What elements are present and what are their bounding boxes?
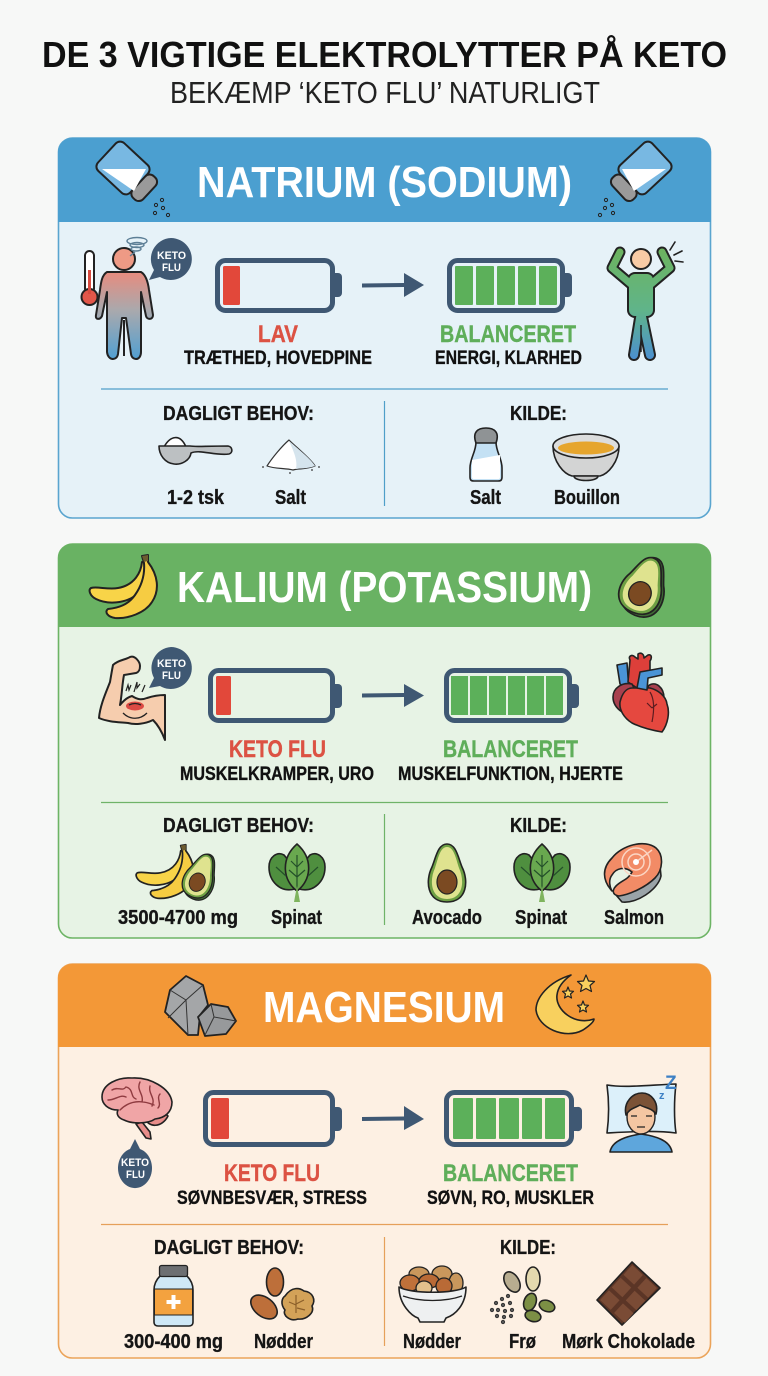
section: daily need: DAGLIGT BEHOV: — [163, 815, 314, 837]
status: balanced — [435, 321, 582, 369]
divider — [101, 1224, 668, 1346]
heading: kalium: KALIUM (POTASSIUM) — [177, 563, 592, 612]
section: source: KILDE: — [510, 815, 567, 837]
icon: heart — [613, 653, 668, 732]
icon: energetic person — [612, 242, 683, 355]
icon: banana and avocado — [136, 845, 224, 904]
header: kalium — [58, 544, 711, 627]
speech bubble: keto flu: FLU — [162, 262, 181, 274]
speech bubble: keto flu — [149, 238, 192, 280]
icon: supplement bottle — [154, 1266, 193, 1326]
icon: spinach — [514, 844, 570, 902]
header: magnesium — [58, 964, 711, 1047]
icon: brain — [102, 1078, 172, 1139]
arrow — [362, 1106, 424, 1130]
icon: banana — [90, 555, 157, 618]
battery: low — [210, 670, 342, 720]
icon: bowl of nuts — [399, 1266, 466, 1322]
status: balanced: BALANCERET — [440, 321, 576, 348]
panel: natrium — [58, 138, 711, 518]
section: daily need: 300-400 mg — [124, 1331, 223, 1353]
status: balanced: MUSKELFUNKTION, HJERTE — [398, 764, 623, 785]
status: balanced: ENERGI, KLARHED — [435, 348, 582, 369]
section: source: KILDE: — [500, 1237, 556, 1259]
icon: seeds — [490, 1267, 556, 1324]
status: balanced: BALANCERET — [443, 736, 578, 763]
icon: salmon — [604, 844, 662, 902]
speech bubble: keto flu — [118, 1139, 152, 1188]
section: source — [399, 1237, 695, 1353]
title: DE 3 VIGTIGE ELEKTROLYTTER PÅ KETO — [42, 34, 727, 75]
divider — [101, 389, 668, 506]
speech bubble: keto flu: FLU — [162, 670, 181, 682]
status: keto flu: SØVNBESVÆR, STRESS — [177, 1188, 367, 1209]
section: daily need: 3500-4700 mg — [118, 907, 238, 929]
status: balanced: BALANCERET — [443, 1160, 578, 1187]
status: low: TRÆTHED, HOVEDPINE — [184, 348, 372, 369]
section: daily need: DAGLIGT BEHOV: — [154, 1237, 304, 1259]
status: keto flu: KETO FLU — [224, 1160, 320, 1187]
battery: balanced — [446, 670, 579, 720]
status: keto flu — [180, 736, 374, 785]
heading: magnesium: MAGNESIUM — [263, 983, 505, 1032]
section: daily need: DAGLIGT BEHOV: — [163, 403, 314, 425]
section: source: KILDE: — [510, 403, 567, 425]
section: source: Frø — [509, 1331, 537, 1353]
icon: sore muscle — [99, 657, 165, 740]
section: daily need: Nødder — [254, 1331, 313, 1353]
status: keto flu: KETO FLU — [229, 736, 326, 763]
section: daily need — [118, 815, 325, 929]
section: daily need: Spinat — [271, 907, 322, 929]
subtitle: BEKÆMP ‘KETO FLU’ NATURLIGT — [170, 75, 600, 110]
icon: spinach — [269, 844, 325, 902]
status: keto flu: MUSKELKRAMPER, URO — [180, 764, 374, 785]
icon: tired person — [96, 238, 153, 359]
battery: low — [218, 260, 342, 310]
icon: nuts — [246, 1268, 314, 1324]
section: source: Nødder — [403, 1331, 461, 1353]
icon: avocado — [428, 844, 466, 902]
speech bubble: keto flu — [149, 647, 192, 689]
arrow — [362, 684, 424, 707]
section: daily need: Salt — [275, 487, 306, 509]
status: balanced: SØVN, RO, MUSKLER — [427, 1188, 594, 1209]
battery: balanced — [446, 1092, 582, 1144]
heading: natrium: NATRIUM (SODIUM) — [197, 158, 572, 207]
section: daily need: 1-2 tsk — [167, 487, 225, 509]
section: source — [412, 815, 664, 929]
icon: sleeping person — [607, 1073, 677, 1152]
icon: rocks — [165, 976, 236, 1036]
icon: salt pile — [262, 440, 320, 474]
section: daily need — [124, 1237, 314, 1353]
section: source: Salt — [470, 487, 501, 509]
icon: bouillon bowl — [553, 434, 619, 480]
icon: salt shaker right — [598, 139, 674, 217]
section: source: Avocado — [412, 907, 482, 929]
section: source: Mørk Chokolade — [562, 1331, 695, 1353]
icon: measuring spoon — [159, 438, 232, 464]
status: low: LAV — [258, 321, 298, 348]
section: source: Salmon — [604, 907, 664, 929]
status: low — [184, 321, 372, 369]
icon: sleeping person: Z — [665, 1073, 677, 1094]
icon: salt shaker left — [94, 139, 170, 217]
section: source — [470, 403, 620, 509]
icon: sleeping person: z — [659, 1090, 665, 1102]
status: balanced — [398, 736, 623, 785]
icon: moon and stars — [536, 975, 594, 1034]
panel: magnesium — [58, 964, 711, 1358]
icon: avocado half — [612, 550, 677, 623]
header: natrium — [58, 138, 711, 222]
arrow — [362, 273, 424, 297]
battery: balanced — [450, 260, 572, 310]
status: balanced — [427, 1160, 594, 1209]
battery: low — [206, 1092, 342, 1144]
icon: salt shaker — [470, 428, 502, 481]
panel: kalium — [58, 544, 711, 938]
divider — [101, 802, 668, 925]
section: source: Bouillon — [554, 487, 620, 509]
icon: thermometer — [82, 251, 98, 305]
speech bubble: keto flu: KETO — [157, 250, 186, 262]
status: keto flu — [177, 1160, 367, 1209]
speech bubble: keto flu: FLU — [126, 1169, 145, 1181]
speech bubble: keto flu: KETO — [121, 1157, 149, 1169]
section: source: Spinat — [515, 907, 567, 929]
speech bubble: keto flu: KETO — [157, 658, 186, 670]
section: daily need — [159, 403, 320, 509]
icon: dark chocolate — [597, 1262, 660, 1325]
